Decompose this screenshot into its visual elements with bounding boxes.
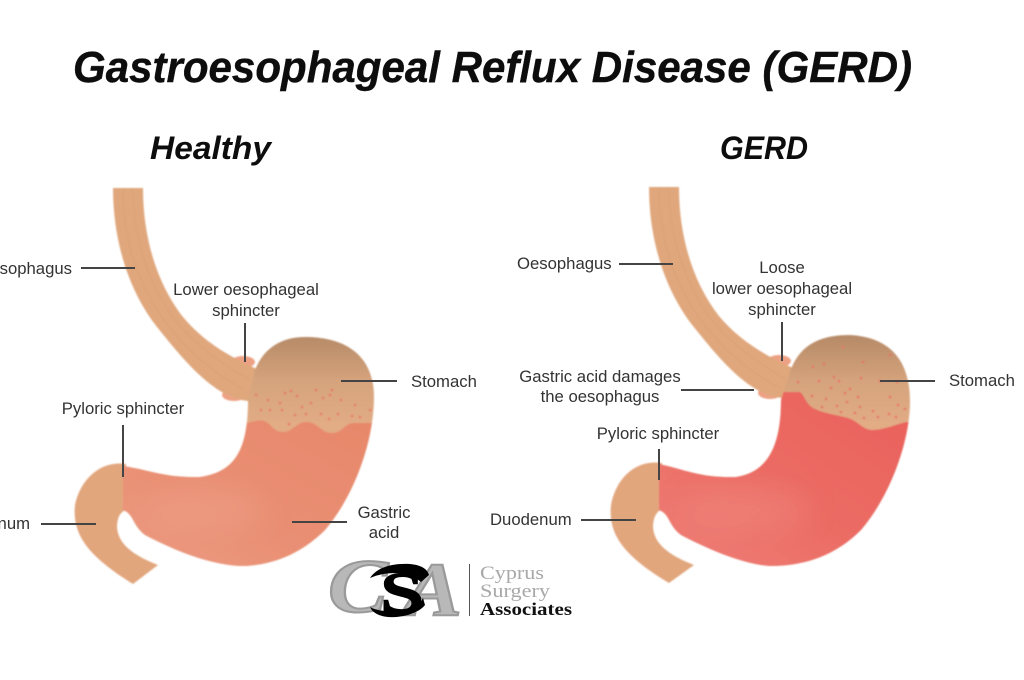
label: Stomach — [880, 371, 1015, 390]
label: Pyloric sphincter: Pyloric sphincter — [597, 424, 720, 443]
logo: Cyprus Surgery Associates — [328, 545, 572, 632]
label: Gastric acid: Gastric — [358, 503, 410, 522]
logo wordmark: Cyprus — [480, 563, 544, 584]
title: Gastroesophageal Reflux Disease (GERD) — [73, 43, 912, 92]
label: Gastric acid damages the oesophagus: Gastric acid damages — [519, 367, 681, 386]
label: Stomach: Stomach — [949, 371, 1015, 390]
heading: Healthy: Healthy — [150, 130, 273, 166]
illustration: healthy stomach — [75, 188, 380, 584]
label: Gastric acid: acid — [369, 523, 399, 542]
duodenum — [611, 462, 694, 583]
label: Stomach: Stomach — [411, 372, 477, 391]
logo mark: CSA monogram: S — [380, 560, 424, 625]
label: Lower oesophageal sphincter: Lower oesophageal — [173, 280, 319, 299]
loose sphincter bumps — [758, 355, 791, 399]
logo mark: CSA monogram: A — [397, 548, 462, 632]
acid dots — [255, 389, 371, 425]
logo wordmark: Associates — [480, 599, 572, 619]
label: Loose lower oesophageal sphincter: sphincter — [748, 300, 816, 319]
logo mark: CSA monogram: C — [328, 545, 390, 629]
label: Loose lower oesophageal sphincter: Loose — [759, 258, 805, 277]
gastric acid — [120, 421, 380, 570]
label: Loose lower oesophageal sphincter — [712, 258, 852, 361]
logo wordmark: Surgery — [480, 581, 551, 602]
label: Gastric acid damages the oesophagus — [519, 367, 754, 406]
stomach upper — [120, 335, 380, 570]
acid dots — [797, 346, 906, 419]
label: Pyloric sphincter: Pyloric sphincter — [62, 399, 185, 418]
label: Gastric acid — [292, 503, 410, 542]
refluxed gastric acid — [655, 392, 915, 570]
panel: healthy stomach diagram — [0, 188, 477, 584]
panel: GERD stomach diagram — [490, 187, 1015, 583]
logo wordmark — [480, 563, 572, 619]
label: Oesophagus: Oesophagus — [517, 254, 612, 273]
label: Duodenum: Duodenum — [490, 510, 572, 529]
heading: GERD: GERD — [720, 130, 808, 166]
label: Pyloric sphincter — [597, 424, 720, 480]
label: Pyloric sphincter — [62, 399, 185, 477]
stomach upper — [655, 333, 915, 570]
oesophagus — [113, 188, 257, 401]
label: Loose lower oesophageal sphincter: lower oesophageal — [712, 279, 852, 298]
duodenum — [75, 463, 158, 584]
sphincter bumps — [222, 356, 255, 401]
label: Lower oesophageal sphincter: sphincter — [212, 301, 280, 320]
oesophagus — [649, 187, 793, 398]
label: Gastric acid damages the oesophagus: the oesophagus — [541, 387, 659, 406]
label: Lower oesophageal sphincter — [173, 280, 319, 362]
illustration: GERD stomach — [611, 187, 915, 583]
logo mark: CSA monogram — [328, 545, 462, 632]
label: Stomach — [341, 372, 477, 391]
